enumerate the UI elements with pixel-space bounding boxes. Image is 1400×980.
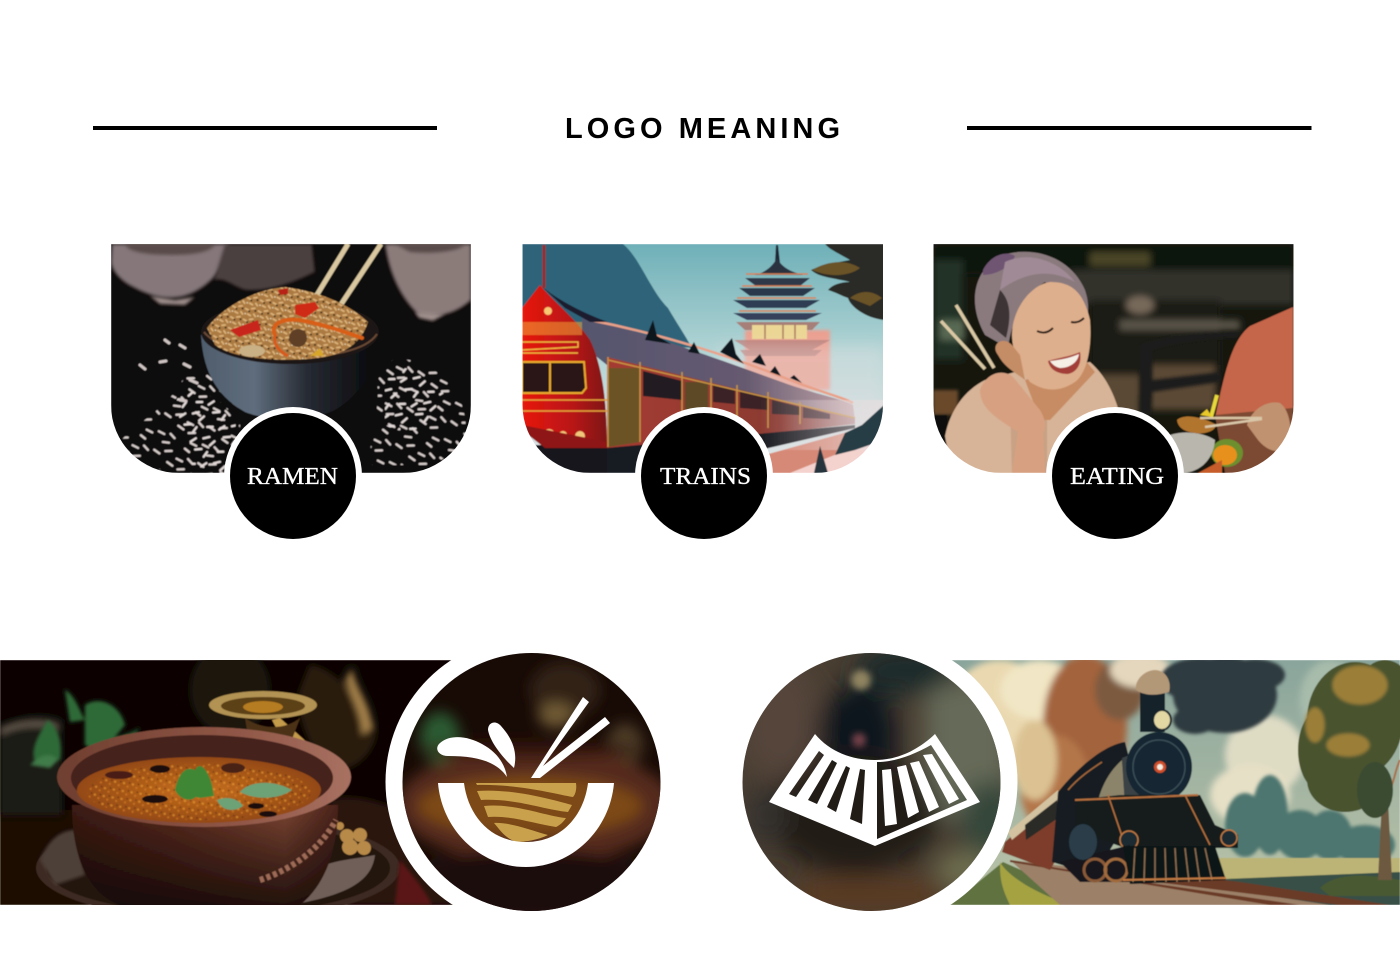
headlamp <box>1153 710 1171 730</box>
locomotive <box>1052 670 1238 884</box>
smoke <box>1160 657 1285 734</box>
badge: RAMEN: RAMEN <box>247 464 338 490</box>
carriages <box>582 318 855 420</box>
title: logo meaning heading <box>93 113 1312 145</box>
carriages <box>1002 795 1062 870</box>
walnut <box>336 822 371 855</box>
neck <box>1025 360 1095 420</box>
chilli <box>395 860 432 905</box>
boiler body <box>1052 742 1140 875</box>
hand <box>980 373 1045 473</box>
person right <box>1215 307 1293 418</box>
panel: eating card <box>933 244 1294 545</box>
garnish <box>175 766 214 800</box>
badge: RAMEN <box>224 407 362 545</box>
boiler face <box>1126 732 1192 802</box>
chimney <box>1140 690 1165 732</box>
badge: EATING <box>1046 407 1184 545</box>
roof ornaments <box>645 320 802 383</box>
gold noodle waves <box>476 783 576 842</box>
ground left <box>950 862 1100 905</box>
herbs <box>30 690 139 772</box>
brass cup <box>208 690 318 741</box>
food <box>207 287 368 360</box>
badge: TRAINS: TRAINS <box>660 464 751 490</box>
tree top right <box>811 244 884 320</box>
food on chopsticks <box>1177 417 1215 433</box>
chopsticks <box>314 244 384 306</box>
cowcatcher <box>1123 846 1226 884</box>
woman shirt <box>945 362 1118 473</box>
small trees <box>814 446 828 473</box>
hair <box>975 252 1088 348</box>
tree line <box>1225 775 1395 865</box>
title: logo meaning heading: LOGO MEANING <box>565 113 840 145</box>
pagoda <box>733 245 830 390</box>
rice grains scattered <box>118 340 466 473</box>
platform <box>1075 795 1238 848</box>
circle: rail logo with blurred background <box>726 636 1020 928</box>
logo: bowl, splash and chopsticks <box>437 697 614 867</box>
pot <box>72 805 338 905</box>
fruit and bowl <box>1211 439 1243 467</box>
banner: clay pot curry photo <box>0 660 453 905</box>
plate <box>36 828 400 905</box>
banner: steam locomotive photo <box>940 652 1400 905</box>
panel: ramen card <box>111 244 471 545</box>
large tree <box>1378 800 1392 880</box>
chopsticks woman <box>941 305 994 369</box>
grass field <box>1190 858 1400 905</box>
soup <box>77 757 321 823</box>
badge: TRAINS <box>635 407 773 545</box>
clouds <box>964 660 1344 821</box>
wheels and cylinders <box>1060 845 1130 882</box>
panel: trains card <box>522 244 884 545</box>
face <box>1012 282 1090 390</box>
bowl <box>201 335 379 419</box>
circle: soup logo with blurred background <box>386 653 660 911</box>
photo: woman laughing with chopsticks <box>933 244 1294 473</box>
ground <box>769 432 846 473</box>
photo: rice bowl with chopsticks <box>111 244 471 473</box>
photo: red train and pagoda <box>522 244 884 473</box>
red locomotive front <box>522 285 607 448</box>
logo: rail track fan <box>769 734 980 846</box>
badge: EATING: EATING <box>1070 464 1164 490</box>
